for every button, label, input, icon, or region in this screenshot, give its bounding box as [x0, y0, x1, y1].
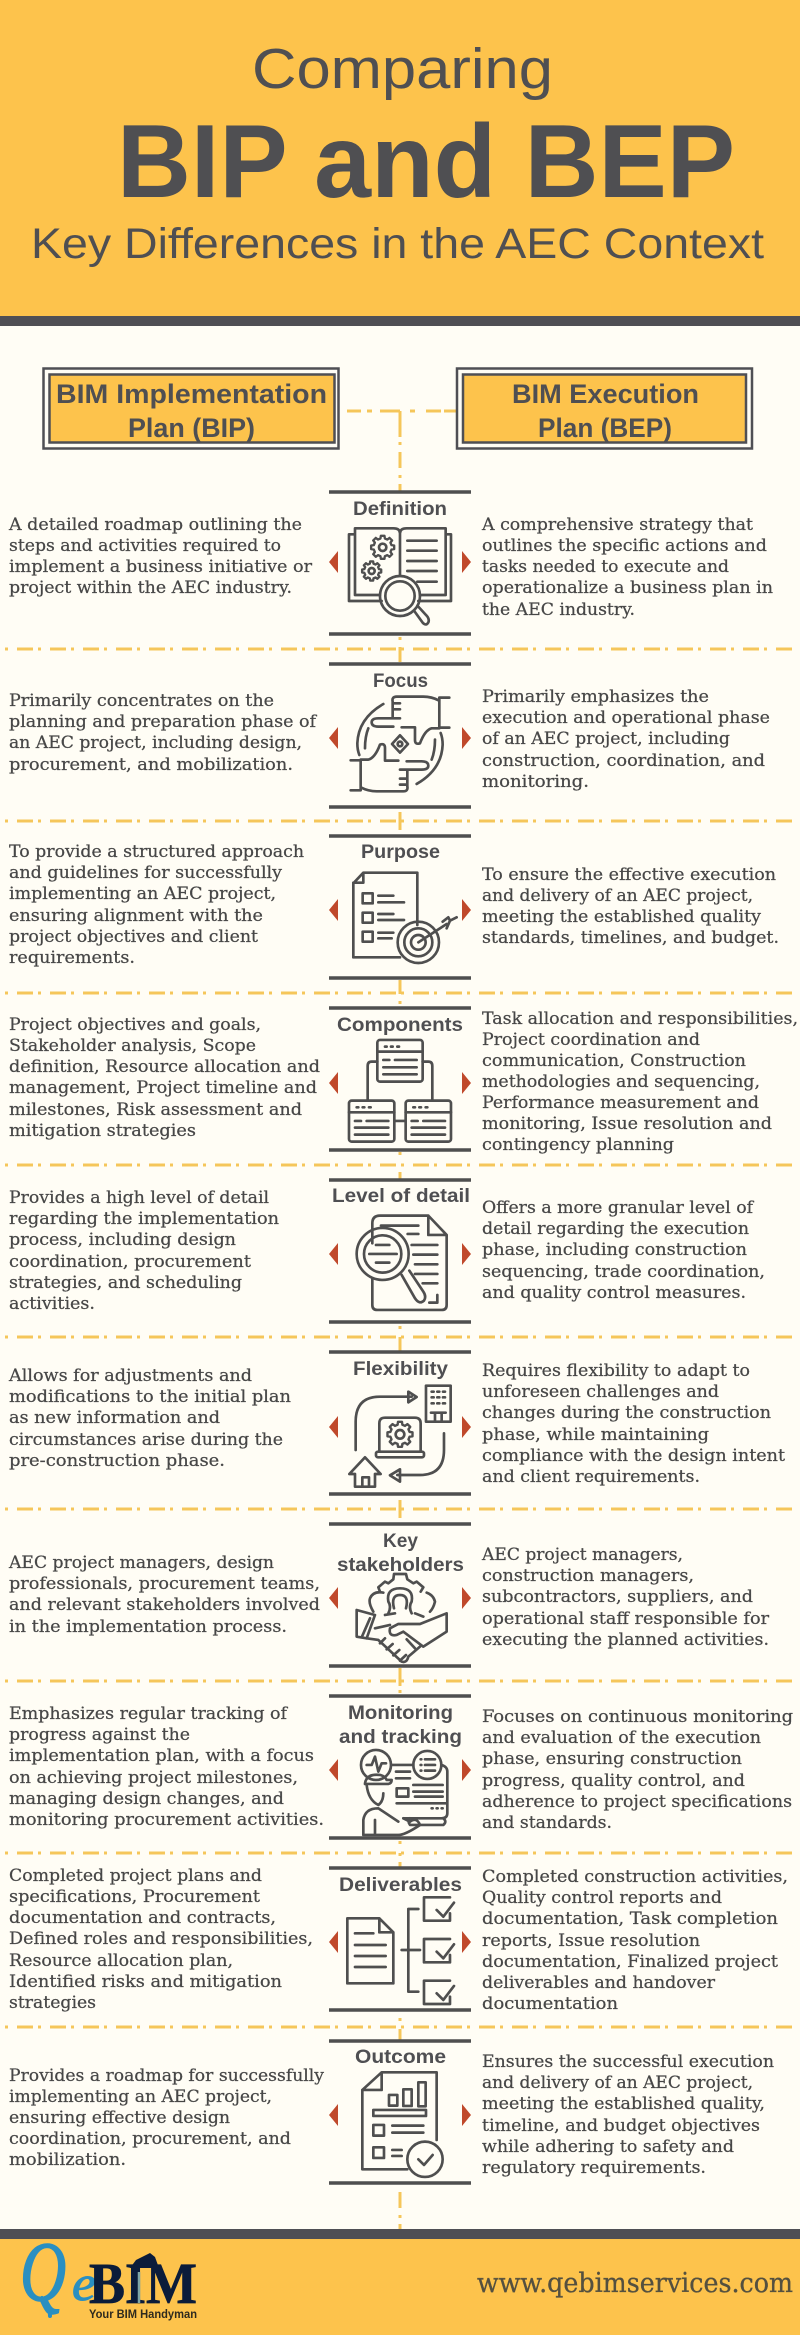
- BEP flexibility text: compliance with the design intent: [482, 1446, 785, 1465]
- BIP flexibility text: [8, 1366, 291, 1470]
- BEP focus text: monitoring.: [482, 772, 589, 791]
- BIP focus text: [9, 691, 318, 774]
- BEP monitoring text: and evaluation of the execution: [482, 1728, 761, 1747]
- BIP stakeholders text: in the implementation process.: [9, 1617, 287, 1636]
- icon: people, gear and handshake: [357, 1574, 447, 1662]
- BEP definition text: the AEC industry.: [482, 600, 635, 619]
- BIP level of detail text: [9, 1188, 279, 1313]
- BEP stakeholders text: [481, 1545, 769, 1649]
- BEP focus text: execution and operational phase: [482, 708, 770, 727]
- title line: BIP and BEP: BIP and BEP: [117, 104, 735, 220]
- BEP components text: communication, Construction: [482, 1051, 746, 1070]
- column header: BEP: [457, 368, 752, 448]
- BEP focus text: Primarily emphasizes the: [482, 687, 709, 706]
- BIP deliverables text: Identified risks and mitigation: [9, 1972, 282, 1991]
- BEP deliverables text: Quality control reports and: [482, 1888, 722, 1907]
- heading: Key stakeholders: stakeholders: [337, 1554, 464, 1576]
- column header: BEP: BIM Execution: [512, 379, 699, 409]
- row: Components: [9, 1008, 798, 1154]
- BEP outcome text: regulatory requirements.: [482, 2158, 706, 2177]
- BEP outcome text: timeline, and budget objectives: [482, 2116, 760, 2135]
- BIP definition text: steps and activities required to: [9, 536, 281, 555]
- BIP flexibility text: Allows for adjustments and: [8, 1366, 252, 1385]
- BEP stakeholders text: executing the planned activities.: [482, 1630, 769, 1649]
- BIP focus text: an AEC project, including design,: [9, 733, 302, 752]
- BIP outcome text: mobilization.: [9, 2150, 126, 2169]
- row: Outcome: [9, 2041, 774, 2183]
- arrows: [329, 1072, 471, 1094]
- BIP stakeholders text: [8, 1553, 320, 1636]
- subtitle: Key Differences in the AEC Context: [31, 220, 764, 268]
- BIP purpose text: To provide a structured approach: [9, 842, 304, 861]
- arrows: [329, 1931, 471, 1953]
- logo: QeBIM: [20, 2225, 197, 2321]
- BIP flexibility text: as new information and: [9, 1408, 220, 1427]
- BIP definition text: project within the AEC industry.: [9, 578, 292, 597]
- BIP level of detail text: Provides a high level of detail: [9, 1188, 269, 1207]
- icon: document with three checked boxes: [347, 1897, 454, 2004]
- BIP outcome text: coordination, procurement, and: [9, 2129, 291, 2148]
- BEP definition text: outlines the specific actions and: [482, 536, 767, 555]
- BIP flexibility text: circumstances arise during the: [9, 1430, 283, 1449]
- BEP monitoring text: progress, quality control, and: [482, 1771, 745, 1790]
- BIP outcome text: implementing an AEC project,: [9, 2087, 272, 2106]
- BEP components text: methodologies and sequencing,: [482, 1072, 760, 1091]
- BEP components text: Project coordination and: [482, 1030, 700, 1049]
- BIP monitoring text: Emphasizes regular tracking of: [9, 1704, 289, 1723]
- BEP purpose text: [482, 865, 779, 947]
- BIP monitoring text: implementation plan, with a focus: [9, 1746, 314, 1765]
- arrows: [329, 1759, 471, 1781]
- BIP monitoring text: [9, 1704, 324, 1829]
- heading: Focus: Focus: [373, 670, 428, 692]
- arrows: [329, 1587, 471, 1609]
- BEP monitoring text: Focuses on continuous monitoring: [482, 1707, 793, 1726]
- BIP monitoring text: on achieving project milestones,: [9, 1768, 298, 1787]
- heading: Outcome: Outcome: [355, 2046, 446, 2068]
- BIP stakeholders text: and relevant stakeholders involved: [9, 1595, 320, 1614]
- icon: checklist document with target: [353, 873, 457, 963]
- BEP level of detail text: sequencing, trade coordination,: [482, 1262, 765, 1281]
- BEP components text: [482, 1009, 798, 1154]
- BIP focus text: planning and preparation phase of: [9, 712, 318, 731]
- arrows: [329, 1416, 471, 1438]
- BIP purpose text: project objectives and client: [9, 927, 258, 946]
- BEP outcome text: [482, 2052, 774, 2177]
- heading: Level of detail: Level of detail: [332, 1185, 470, 1207]
- BEP monitoring text: [482, 1707, 793, 1832]
- BEP flexibility text: changes during the construction: [482, 1403, 771, 1422]
- BEP flexibility text: Requires flexibility to adapt to: [482, 1361, 750, 1380]
- heading: Deliverables: Deliverables: [339, 1874, 462, 1896]
- icon: report with bars and check: [362, 2072, 443, 2177]
- BEP flexibility text: and client requirements.: [482, 1467, 700, 1486]
- BIP definition text: A detailed roadmap outlining the: [8, 515, 302, 534]
- BEP outcome text: meeting the established quality,: [482, 2094, 765, 2113]
- BIP purpose text: [9, 842, 304, 967]
- BEP stakeholders text: AEC project managers,: [481, 1545, 683, 1564]
- BIP stakeholders text: professionals, procurement teams,: [9, 1574, 320, 1593]
- BIP components text: management, Project timeline and: [9, 1078, 317, 1097]
- BIP definition text: implement a business initiative or: [9, 557, 312, 576]
- BIP deliverables text: Defined roles and responsibilities,: [9, 1929, 313, 1948]
- row: Definition: [8, 492, 773, 634]
- BEP components text: Performance measurement and: [482, 1093, 759, 1112]
- logo: QeBIM: Your BIM Handyman: [89, 2309, 197, 2321]
- arrows: [329, 551, 471, 573]
- BEP deliverables text: Completed construction activities,: [482, 1867, 788, 1886]
- BEP definition text: A comprehensive strategy that: [481, 515, 753, 534]
- BIP monitoring text: managing design changes, and: [9, 1789, 284, 1808]
- BIP level of detail text: regarding the implementation: [9, 1209, 279, 1228]
- BIP flexibility text: modifications to the initial plan: [9, 1387, 291, 1406]
- BIP deliverables text: strategies: [9, 1993, 96, 2012]
- BEP purpose text: To ensure the effective execution: [482, 865, 776, 884]
- column header: BIP: [44, 368, 338, 448]
- BIP purpose text: implementing an AEC project,: [9, 884, 276, 903]
- BEP focus text: construction, coordination, and: [482, 751, 765, 770]
- BIP outcome text: Provides a roadmap for successfully: [9, 2066, 325, 2085]
- BIP level of detail text: strategies, and scheduling: [9, 1273, 242, 1292]
- BEP level of detail text: phase, including construction: [482, 1240, 747, 1259]
- BEP level of detail text: [482, 1198, 765, 1302]
- footer bar: [0, 2225, 800, 2335]
- BIP monitoring text: progress against the: [9, 1725, 190, 1744]
- BIP components text: [9, 1015, 320, 1140]
- icon: engineer at monitor: [361, 1750, 447, 1835]
- BEP components text: monitoring, Issue resolution and: [482, 1114, 772, 1133]
- BEP purpose text: meeting the established quality: [482, 907, 762, 926]
- column header: BEP: Plan (BEP): [538, 413, 672, 443]
- BIP outcome text: ensuring effective design: [9, 2108, 230, 2127]
- icon: two hands joining with target gear: [351, 697, 449, 791]
- BIP focus text: procurement, and mobilization.: [9, 755, 293, 774]
- BEP outcome text: and delivery of an AEC project,: [482, 2073, 753, 2092]
- BIP level of detail text: process, including design: [9, 1230, 236, 1249]
- row: Monitoring and tracking: [9, 1696, 793, 1838]
- BEP stakeholders text: operational staff responsible for: [482, 1609, 769, 1628]
- heading: Key stakeholders: Key: [383, 1530, 418, 1552]
- BEP components text: Task allocation and responsibilities,: [482, 1009, 798, 1028]
- BEP focus text: [482, 687, 770, 791]
- row: Focus: [9, 664, 770, 807]
- heading: Monitoring and tracking: [339, 1702, 462, 1748]
- arrows: [329, 1243, 471, 1265]
- BEP deliverables text: [482, 1867, 788, 2013]
- BIP components text: Project objectives and goals,: [9, 1015, 261, 1034]
- logo: QeBIM: BIM: [89, 2251, 197, 2316]
- BEP stakeholders text: construction managers,: [482, 1566, 694, 1585]
- BEP definition text: [481, 515, 773, 619]
- row: Flexibility: [8, 1352, 785, 1494]
- BIP level of detail text: coordination, procurement: [9, 1252, 251, 1271]
- BEP flexibility text: [482, 1361, 785, 1486]
- BIP outcome text: [9, 2066, 325, 2169]
- BIP stakeholders text: AEC project managers, design: [8, 1553, 274, 1572]
- BEP level of detail text: and quality control measures.: [482, 1283, 746, 1302]
- arrows: [329, 899, 471, 921]
- BIP deliverables text: Completed project plans and: [9, 1866, 262, 1885]
- heading: Key stakeholders: [337, 1530, 464, 1576]
- BIP flexibility text: pre-construction phase.: [9, 1451, 225, 1470]
- logo: QeBIM: e: [72, 2255, 96, 2311]
- heading: Monitoring and tracking: Monitoring: [348, 1702, 453, 1724]
- arrows: [329, 2104, 471, 2126]
- BEP deliverables text: documentation, Finalized project: [482, 1952, 778, 1971]
- BEP deliverables text: documentation: [482, 1994, 618, 2013]
- BEP flexibility text: phase, while maintaining: [482, 1425, 709, 1444]
- icon: building, laptop gear, house cycle: [349, 1386, 451, 1487]
- BEP monitoring text: adherence to project specifications: [482, 1792, 792, 1811]
- BIP monitoring text: monitoring procurement activities.: [9, 1810, 324, 1829]
- BIP components text: milestones, Risk assessment and: [9, 1100, 302, 1119]
- icon: linked windows hierarchy: [349, 1040, 451, 1142]
- heading: Components: Components: [337, 1014, 463, 1036]
- BEP definition text: operationalize a business plan in: [482, 578, 773, 597]
- BEP outcome text: Ensures the successful execution: [482, 2052, 774, 2071]
- BEP purpose text: and delivery of an AEC project,: [482, 886, 753, 905]
- column header: BIP: BIM Implementation: [56, 379, 327, 409]
- BEP flexibility text: unforeseen challenges and: [482, 1382, 719, 1401]
- BEP monitoring text: phase, ensuring construction: [482, 1749, 742, 1768]
- BEP level of detail text: Offers a more granular level of: [482, 1198, 755, 1217]
- BEP monitoring text: and standards.: [482, 1813, 612, 1832]
- BIP purpose text: requirements.: [9, 948, 135, 967]
- BEP stakeholders text: subcontractors, suppliers, and: [482, 1587, 753, 1606]
- BIP components text: definition, Resource allocation and: [9, 1057, 320, 1076]
- row: Key stakeholders: [8, 1524, 769, 1666]
- BEP level of detail text: detail regarding the execution: [482, 1219, 749, 1238]
- column header: BIP: Plan (BIP): [128, 413, 255, 443]
- BIP deliverables text: [9, 1866, 313, 2012]
- heading: Definition: Definition: [353, 498, 447, 520]
- BEP deliverables text: documentation, Task completion: [482, 1909, 778, 1928]
- logo: QeBIM: Q: [20, 2225, 66, 2319]
- row: Deliverables: [9, 1866, 788, 2013]
- heading: Monitoring and tracking: and tracking: [339, 1726, 462, 1748]
- BEP deliverables text: reports, Issue resolution: [482, 1931, 700, 1950]
- BIP focus text: Primarily concentrates on the: [9, 691, 274, 710]
- row: Purpose: [9, 836, 779, 978]
- BEP components text: contingency planning: [482, 1135, 674, 1154]
- row: Level of detail: [9, 1180, 765, 1322]
- BIP components text: Stakeholder analysis, Scope: [9, 1036, 256, 1055]
- icon: document under magnifier: [357, 1216, 447, 1310]
- heading: Flexibility: Flexibility: [353, 1358, 448, 1380]
- BIP components text: mitigation strategies: [9, 1121, 196, 1140]
- arrows: [329, 727, 471, 749]
- BEP purpose text: standards, timelines, and budget.: [482, 928, 779, 947]
- BIP purpose text: ensuring alignment with the: [9, 906, 263, 925]
- icon: open book with gears and magnifier: [349, 528, 451, 624]
- heading: Purpose: Purpose: [361, 841, 440, 863]
- BIP purpose text: and guidelines for successfully: [9, 863, 283, 882]
- header banner: [0, 0, 800, 326]
- BIP deliverables text: documentation and contracts,: [9, 1908, 276, 1927]
- BIP deliverables text: specifications, Procurement: [9, 1887, 260, 1906]
- BIP definition text: [8, 515, 312, 597]
- BEP focus text: of an AEC project, including: [482, 729, 730, 748]
- BIP deliverables text: Resource allocation plan,: [9, 1951, 233, 1970]
- title line: Comparing: Comparing: [252, 37, 553, 101]
- BIP level of detail text: activities.: [9, 1294, 95, 1313]
- BEP deliverables text: deliverables and handover: [482, 1973, 715, 1992]
- BEP outcome text: while adhering to safety and: [482, 2137, 734, 2156]
- BEP definition text: tasks needed to execute and: [482, 557, 729, 576]
